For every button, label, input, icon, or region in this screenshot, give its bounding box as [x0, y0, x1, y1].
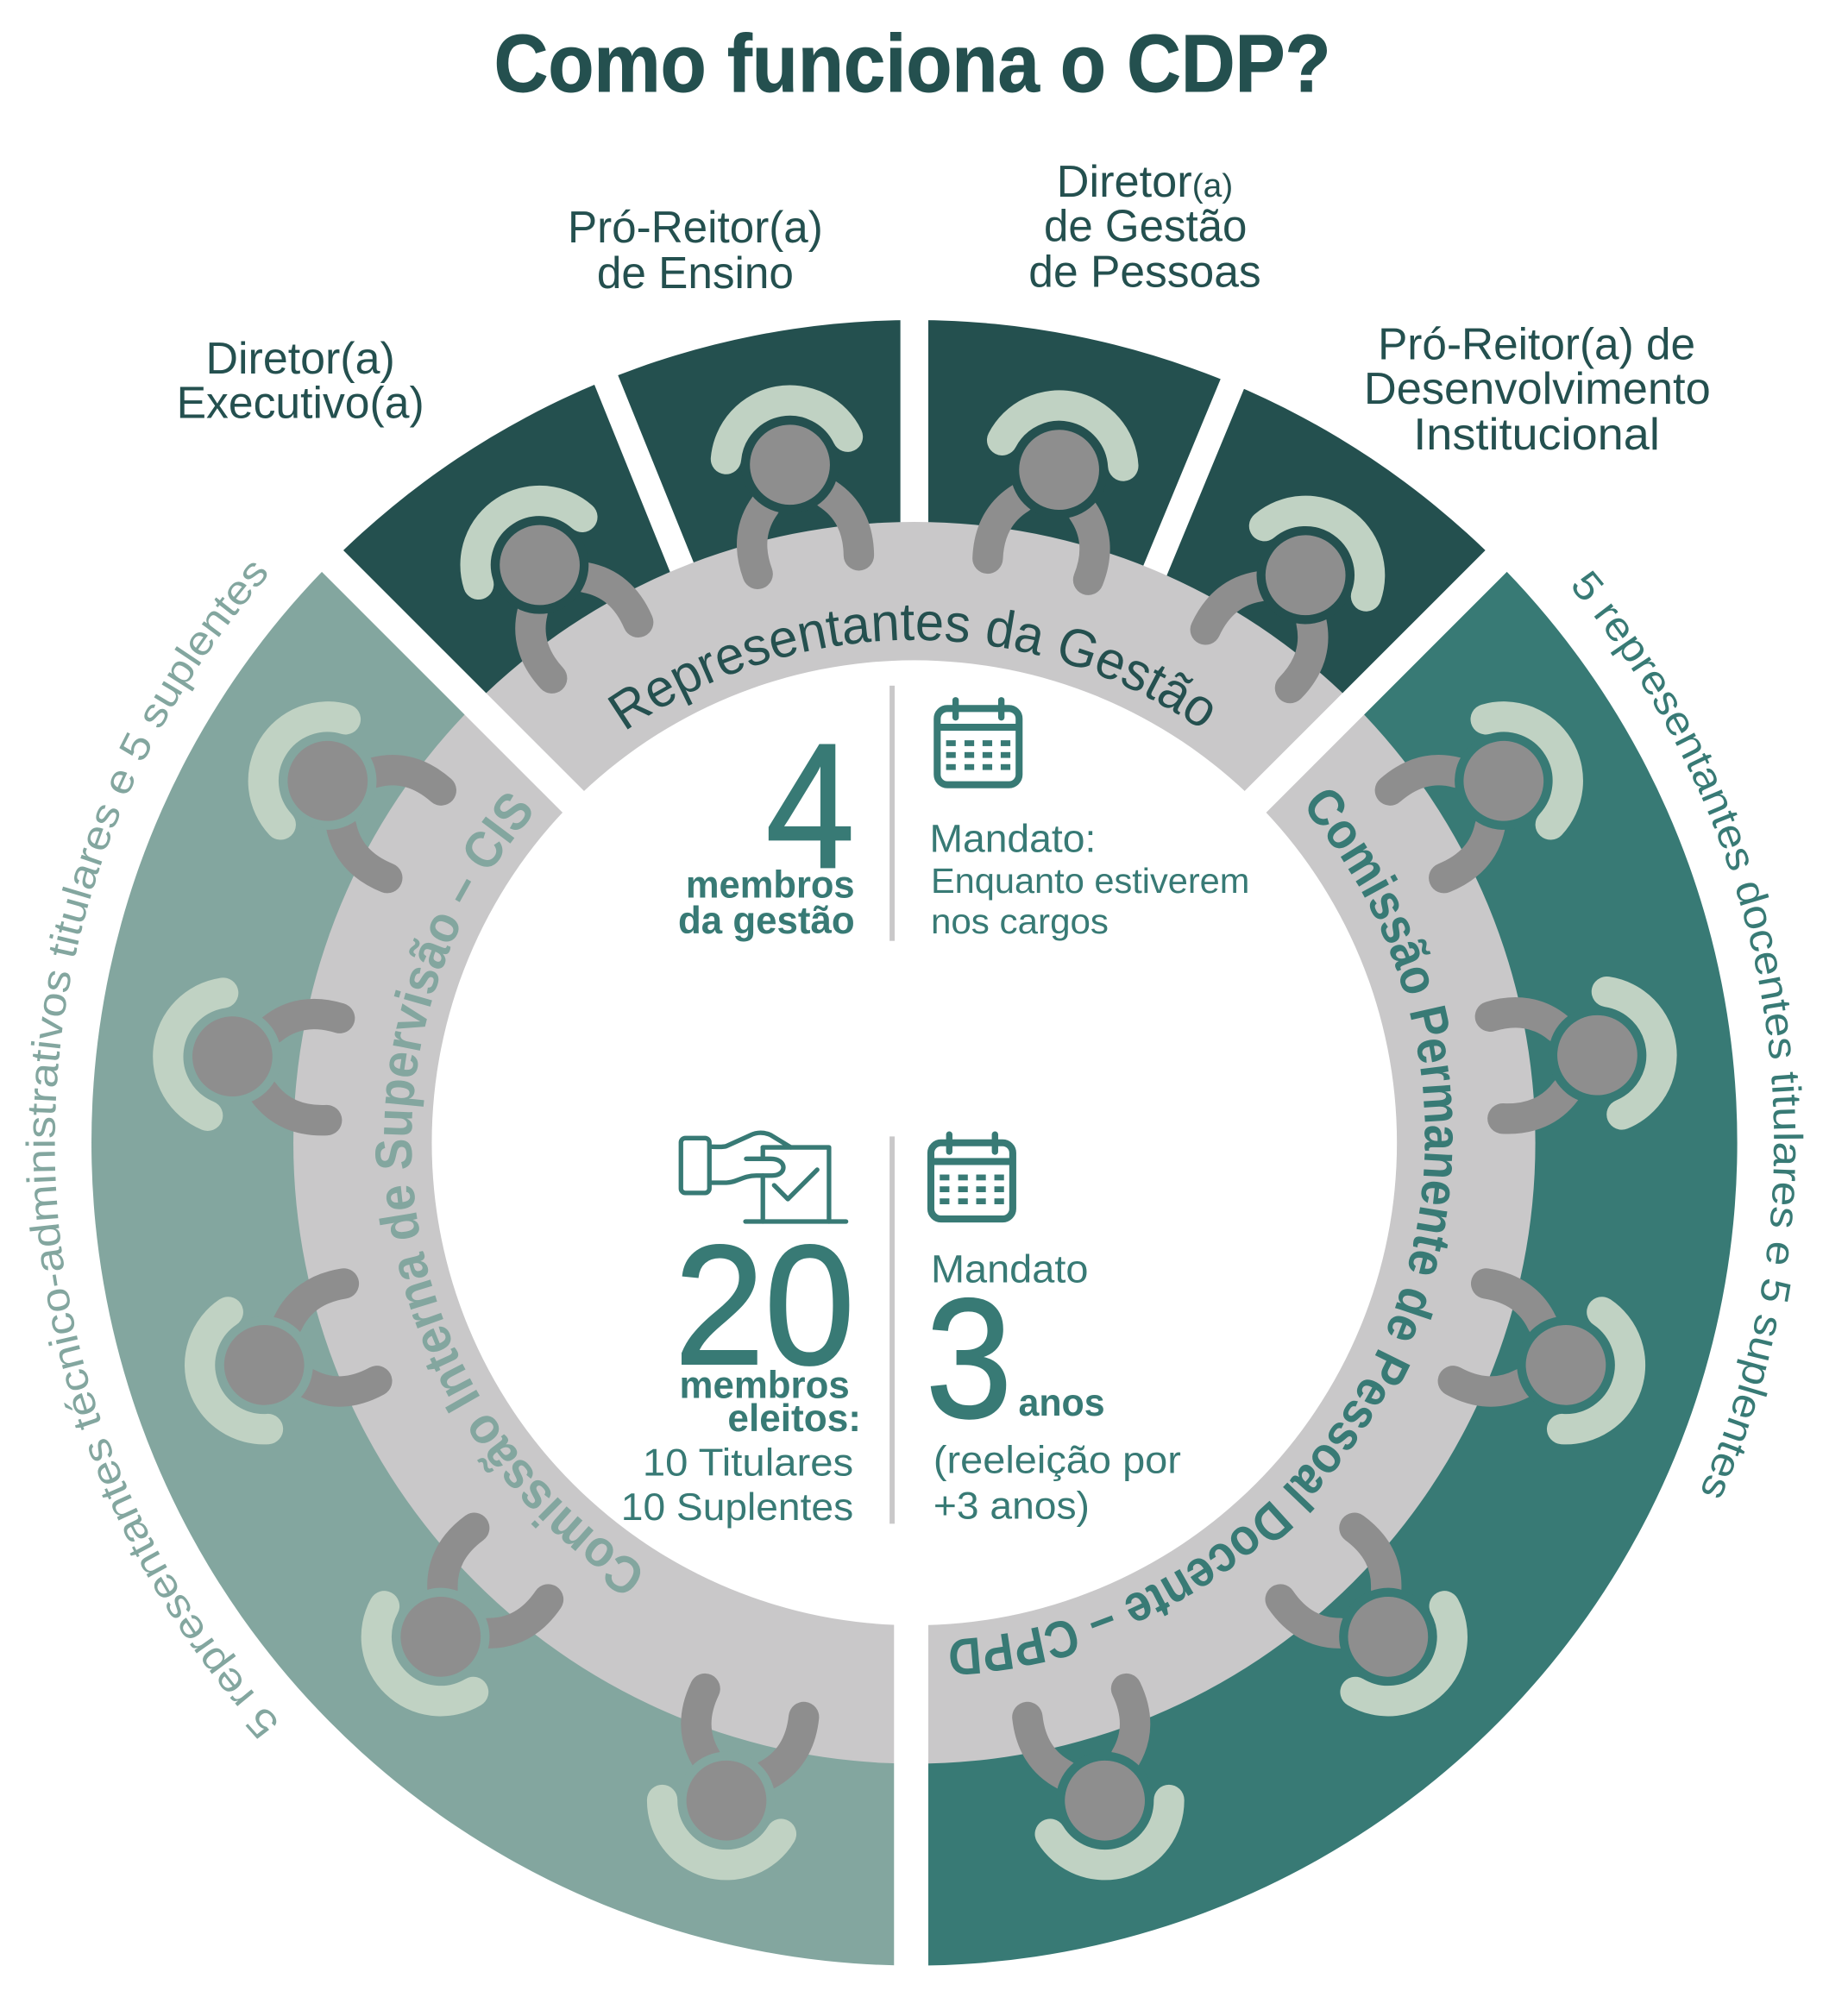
text: mandato 3 anos: (reeleição por	[933, 1439, 1181, 1481]
outer label: técnico-administrativos: 5 representantes técnico-administrativos titulares e 5 suplentes	[26, 562, 276, 1739]
person: gestão 3	[977, 394, 1133, 582]
stat: 20 membros eleitos: 10 Suplentes	[621, 1486, 853, 1529]
text: mandato 3 anos: 3	[926, 1263, 1012, 1454]
stat: 20 membros eleitos: membros	[680, 1365, 850, 1407]
person: CPPD 4	[1273, 1521, 1477, 1726]
label: Diretor de Gestão de Pessoas: de Gestão	[1044, 201, 1247, 251]
panel: CPPD outer sector	[915, 561, 1738, 1966]
text: mandato 3 anos	[926, 1247, 1181, 1527]
text: mandato gestão: Enquanto estiverem	[931, 861, 1249, 901]
label: Pró-Reitor de Ensino	[568, 202, 823, 298]
divider: eleitos block	[889, 1136, 895, 1523]
person: CPPD 5	[1017, 1686, 1182, 1880]
label: Diretor de Gestão de Pessoas: Diretor(a)	[1057, 156, 1233, 206]
text: mandato gestão: nos cargos	[931, 901, 1109, 941]
person: CPPD 2	[1489, 986, 1669, 1129]
person: CIS 2	[160, 987, 341, 1131]
stat: 20 membros eleitos: 20	[675, 1209, 855, 1400]
person: CPPD 3	[1449, 1274, 1647, 1444]
label: Pró-Reitor de Desenvolvimento Institucional: Pró-Reitor(a) de	[1378, 319, 1695, 369]
person: CIS 5	[650, 1686, 814, 1880]
person: CIS 3	[184, 1274, 380, 1444]
ring label: CPPD: Comissão Permanente de Pessoal Docente – CPPD	[950, 790, 1453, 1674]
label: Pró-Reitor de Desenvolvimento Institucional: Institucional	[1413, 409, 1660, 459]
ring label: Representantes da Gestão: Representantes da Gestão	[607, 606, 1213, 730]
text: mandato 3 anos: Mandato	[931, 1247, 1088, 1291]
text: mandato gestão	[929, 817, 1249, 941]
label: Diretor Executivo	[177, 333, 424, 427]
stat: 20 membros eleitos: eleitos:	[727, 1397, 861, 1440]
label: Diretor Executivo: Executivo(a)	[177, 377, 424, 427]
person: gestão 2	[718, 390, 869, 575]
text: mandato gestão: Mandato:	[929, 817, 1096, 861]
divider: gestão block	[889, 686, 895, 941]
icon: calendar bottom	[931, 1131, 1013, 1219]
stat: 4 membros da gestão	[678, 706, 855, 942]
label: Pró-Reitor de Desenvolvimento Institucional: Desenvolvimento	[1364, 363, 1711, 413]
label: Diretor de Gestão de Pessoas	[1028, 156, 1261, 297]
stat: 20 membros eleitos	[621, 1209, 861, 1529]
ring label: CIS: Comissão Interna de Supervisão – CIS	[375, 794, 640, 1592]
panel: gestão outer sector	[332, 320, 1496, 1143]
label: Pró-Reitor de Ensino: Pró-Reitor(a)	[568, 202, 823, 252]
stat: 4 membros da gestão: da gestão	[678, 900, 855, 942]
person: CPPD 1	[1385, 694, 1591, 887]
panel: white centre	[431, 660, 1397, 1625]
icon: calendar top	[937, 697, 1019, 785]
stat: 20 membros eleitos: 10 Titulares	[643, 1441, 853, 1484]
text: mandato 3 anos: +3 anos)	[933, 1485, 1090, 1527]
label: Diretor de Gestão de Pessoas: de Pessoas	[1028, 247, 1261, 297]
label: Pró-Reitor de Ensino: de Ensino	[597, 248, 794, 298]
panel: gray table ring	[293, 522, 1536, 1764]
stat: 4 membros da gestão: membros	[686, 864, 855, 907]
text: mandato 3 anos: anos	[1019, 1382, 1105, 1424]
person: CIS 4	[351, 1521, 556, 1726]
title: Como funciona o CDP?	[494, 18, 1331, 109]
label: Diretor Executivo: Diretor(a)	[205, 333, 395, 383]
panel: CIS outer sector	[91, 561, 915, 1966]
label: Pró-Reitor de Desenvolvimento Institucional	[1364, 319, 1711, 459]
person: gestão 1	[453, 477, 647, 684]
person: CIS 1	[241, 694, 447, 887]
outer label: docentes: 5 representantes docentes titulares e 5 suplentes	[1574, 570, 1803, 1498]
stat: 4 membros da gestão: 4	[766, 706, 855, 905]
icon: ballot vote	[681, 1133, 846, 1222]
person: gestão 4	[1197, 487, 1392, 694]
